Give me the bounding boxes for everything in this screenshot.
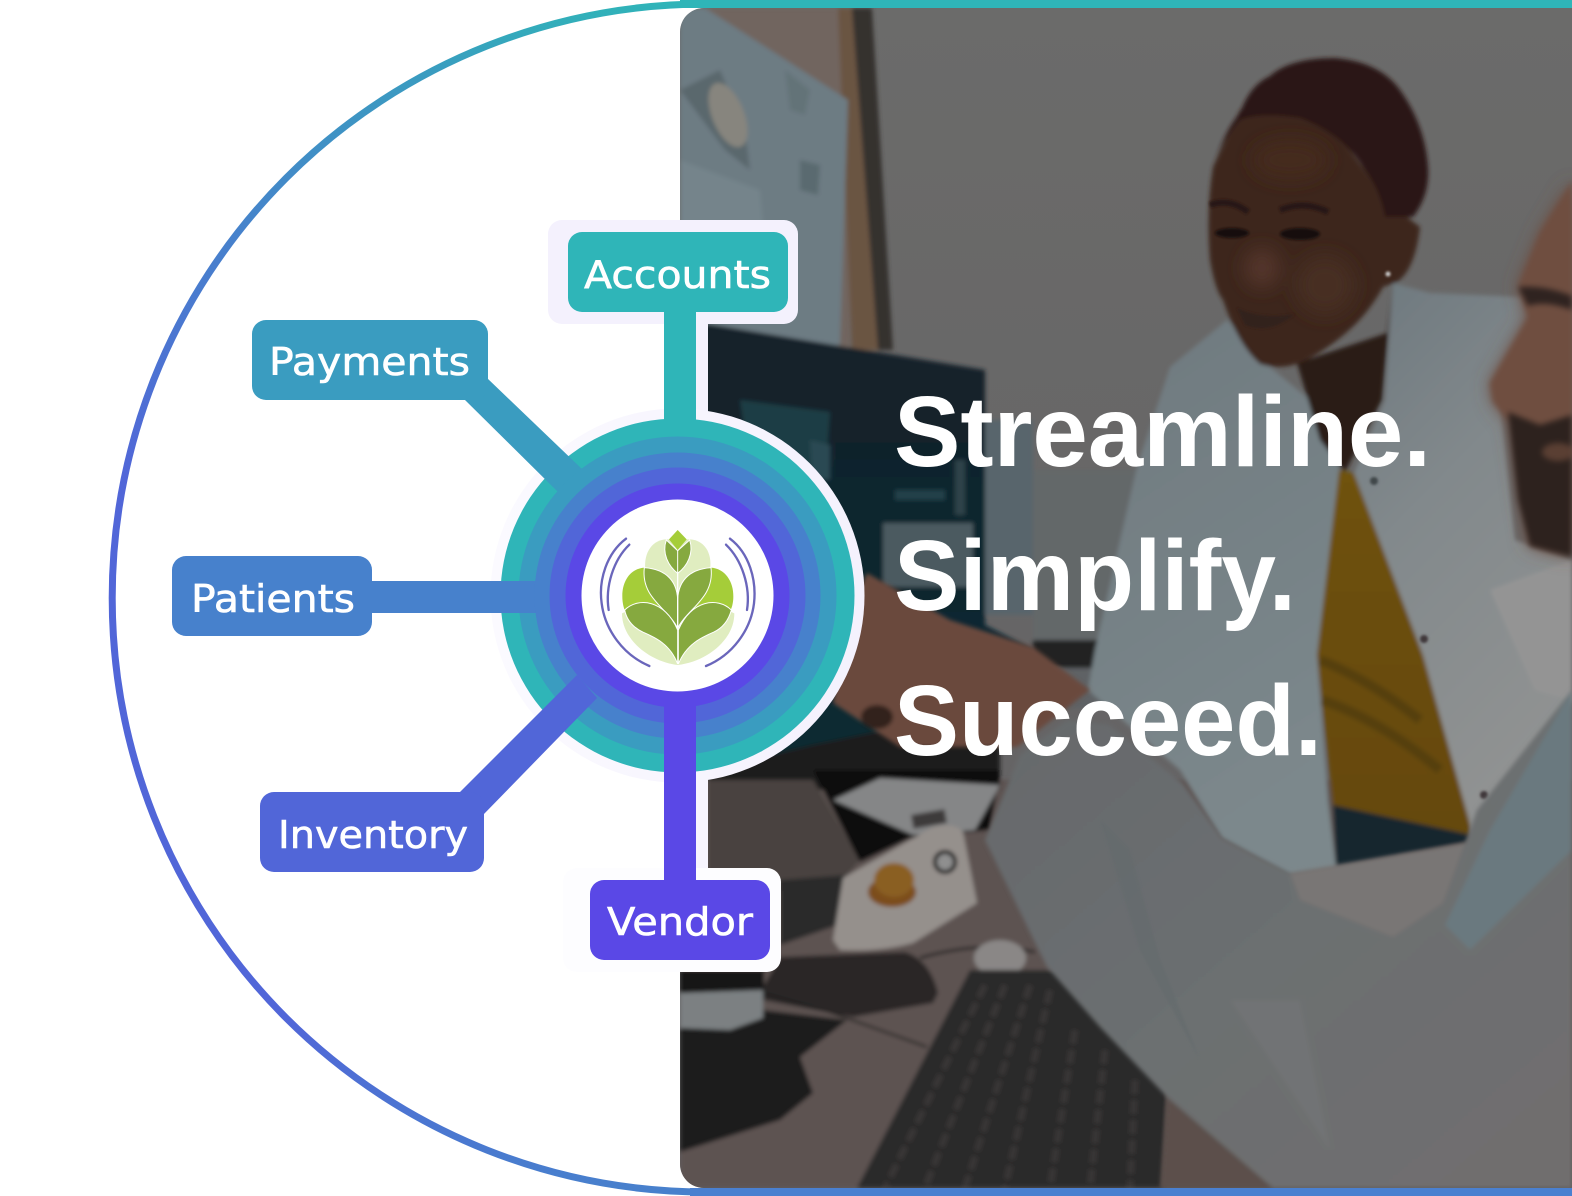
hub halo	[490, 324, 864, 870]
left wall and wooden strip	[714, 9, 850, 351]
bottom blue bar	[690, 1188, 1572, 1196]
headline: Succeed.	[894, 665, 1322, 777]
label: Inventory: Inventory	[278, 813, 468, 857]
hub ring 2	[518, 436, 836, 754]
pad	[763, 952, 938, 1017]
label: Vendor	[563, 690, 781, 972]
hub white centre	[582, 500, 774, 692]
man's shoulder	[1445, 690, 1572, 950]
stapler-like device	[833, 778, 1000, 835]
top teal bar	[680, 0, 1572, 8]
paper-like folds	[1290, 843, 1465, 937]
label: Vendor: Vendor	[607, 900, 753, 944]
desk	[680, 780, 1572, 1188]
label: Patients: Patients	[191, 577, 355, 621]
label: Accounts	[548, 220, 798, 440]
neck	[1295, 322, 1390, 476]
headline: Simplify.	[894, 520, 1296, 632]
hub ring 4	[550, 468, 806, 724]
woman's face	[1209, 110, 1420, 367]
yellow shirt	[1317, 470, 1474, 835]
headline: Streamline.	[894, 376, 1431, 488]
face highlights and features	[1244, 156, 1346, 307]
icon: leaf logo	[601, 530, 755, 666]
hub outer teal ring	[500, 418, 854, 772]
large semicircle outline	[112, 4, 706, 1192]
label: Payments: Payments	[269, 340, 470, 384]
photo: clinicians at a workstation	[680, 8, 1572, 1188]
control unit	[833, 825, 977, 950]
label: Payments	[252, 320, 583, 492]
keyboard	[857, 970, 1167, 1188]
desk wedge under sleeve	[1158, 1101, 1168, 1187]
hub ring 3	[534, 452, 820, 738]
sticker	[974, 940, 1026, 976]
right-hand light panel	[985, 420, 1033, 615]
headline	[894, 376, 1431, 777]
label: Inventory	[260, 675, 597, 872]
man's sleeve	[985, 690, 1572, 1188]
woman's coat, left panel	[1088, 320, 1340, 875]
dark monitor	[708, 324, 1030, 758]
man's face	[1490, 180, 1572, 557]
hub ring 5	[566, 484, 790, 708]
hair	[1213, 58, 1428, 217]
man's hand	[833, 573, 1090, 747]
trousers	[1333, 805, 1472, 868]
woman's coat, right panel	[1354, 283, 1572, 838]
label: Patients	[172, 556, 550, 636]
label: Accounts: Accounts	[584, 253, 771, 297]
rear monitor	[680, 8, 848, 345]
